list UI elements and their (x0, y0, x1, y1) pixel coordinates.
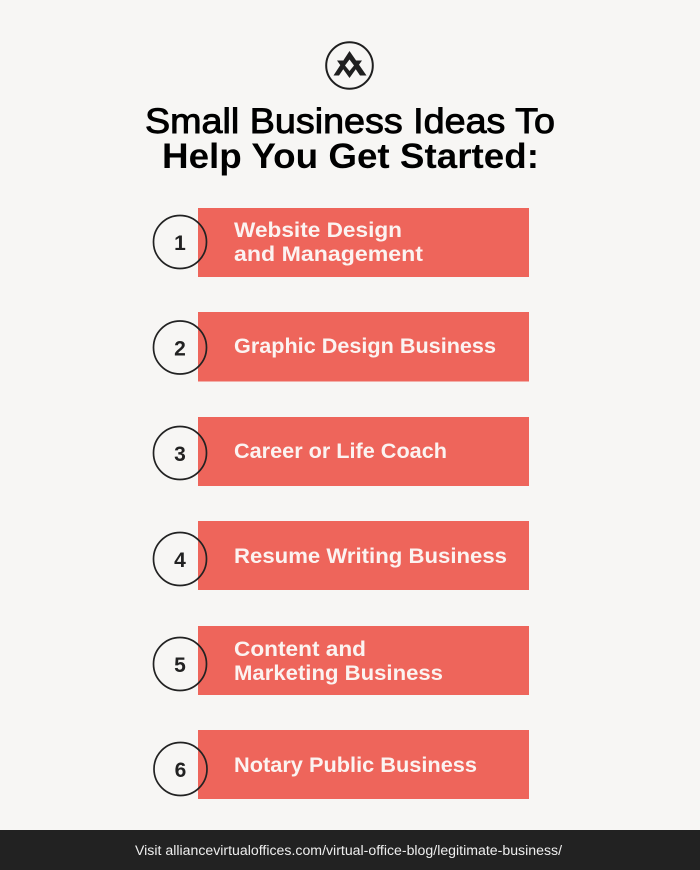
title: Help You Get Started: (162, 137, 539, 176)
list item 3: Career or Life Coach (234, 440, 447, 463)
list item 1: 1 (174, 232, 186, 255)
list item 4: Resume Writing Business (234, 545, 507, 568)
list item 6: Notary Public Business (234, 754, 477, 777)
footer bar: Visit alliancevirtualoffices.com/virtual-office-blog/legitimate-business/ (135, 843, 562, 858)
list item 6 (154, 730, 529, 799)
list item 5: Content and (234, 638, 366, 661)
icon: mountain logo (326, 42, 373, 89)
list item 5: Marketing Business (234, 662, 443, 685)
list item 1: Website Design (234, 219, 402, 242)
list item 3 (154, 417, 529, 486)
list item 1: and Management (234, 243, 423, 266)
footer bar (0, 830, 700, 870)
list item 4 (154, 521, 529, 590)
list item 5 (154, 626, 529, 695)
title (145, 102, 555, 176)
title: Small Business Ideas To (145, 102, 555, 141)
list item 2: 2 (174, 338, 186, 360)
list item 2 (154, 312, 529, 382)
list item 5: 5 (174, 654, 186, 677)
list item 2: Graphic Design Business (234, 335, 496, 358)
list item 6: 6 (175, 759, 186, 782)
list item 1 (154, 208, 529, 277)
list item 4: 4 (174, 549, 186, 572)
list item 3: 3 (174, 443, 186, 466)
